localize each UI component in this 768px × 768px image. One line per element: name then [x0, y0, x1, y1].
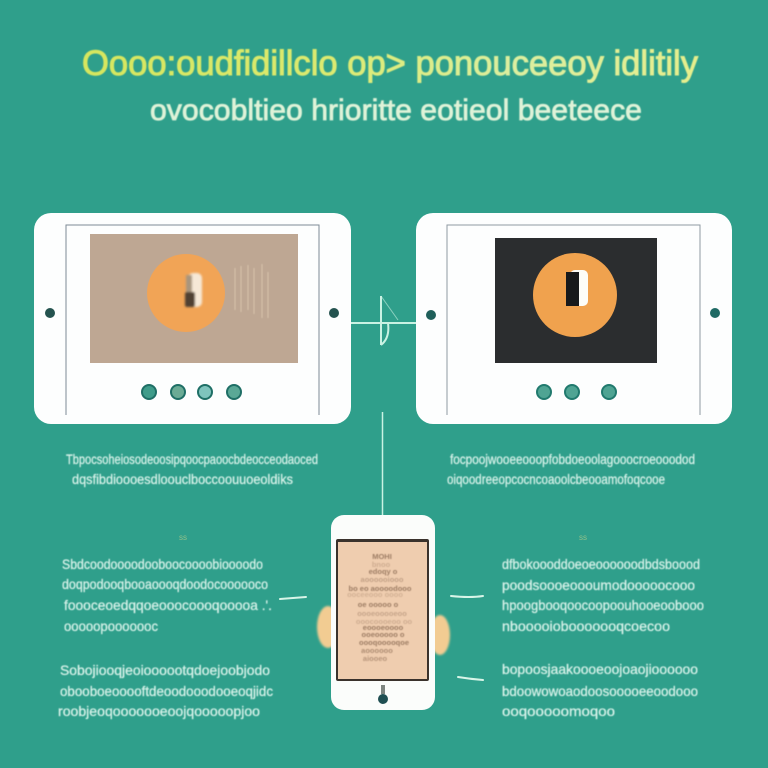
line 1: Sbdcoodoooodooboocoooobioooodo	[62, 556, 263, 572]
line 3: foooceoedqqoeooocoooqooooa .'.	[64, 597, 272, 613]
dot 1	[142, 385, 156, 399]
line 3: roobjeoqooooooeoojqooooopjoo	[58, 703, 260, 719]
screen line 1: MOHI	[372, 552, 392, 561]
title line 2: ovocobltieo hrioritte eotieol beeteece	[150, 94, 642, 127]
text block: right upper	[502, 556, 704, 634]
screen line 11: ooeooooo o	[362, 630, 405, 639]
dot 3	[602, 385, 616, 399]
line 4: ooooopooooooc	[64, 618, 158, 634]
line 3: ooqooooomoqoo	[502, 703, 615, 719]
circle glyph	[185, 273, 202, 307]
line 2: oiqoodreeopcocncoaoolcbeooamofoqcooe	[447, 471, 665, 487]
home button	[378, 694, 388, 704]
line 2: dqsfibdioooesdloouclboccoouuoeoldiks	[72, 471, 293, 487]
screen line 8: oooeooooeoo	[357, 609, 407, 618]
control dots	[142, 385, 241, 399]
dot 2	[565, 385, 579, 399]
text block: left caption	[66, 451, 318, 487]
line 3: hpoogbooqoocoopoouhooeoobooo	[502, 597, 704, 613]
left callout	[280, 597, 306, 599]
line 2: doqpodooqbooaoooqdoodocoooooco	[62, 576, 268, 592]
phone body	[331, 515, 435, 710]
dark slit	[566, 272, 579, 306]
text block: left upper	[62, 556, 272, 634]
text block: right caption	[447, 451, 695, 487]
screen text	[347, 552, 413, 663]
glyph dark part	[185, 292, 195, 307]
screen line 12: oooqooooqoe	[359, 638, 409, 647]
title	[82, 44, 698, 127]
title line 1: Oooo:oudfidillclo op> ponouceeoy idlitily	[82, 44, 698, 83]
screen line 4: aoooooiooo	[361, 575, 404, 584]
screen line 13: aoooooo	[361, 646, 393, 655]
small mark left: ss	[179, 533, 187, 542]
dark image	[495, 238, 657, 363]
text block: right lower	[502, 661, 698, 719]
left hand	[317, 606, 339, 648]
home stem	[381, 685, 385, 694]
connector lines with small arrow	[351, 296, 416, 515]
tan image	[90, 234, 298, 363]
screen line 9: ooocoooeoo oo	[356, 617, 413, 626]
orange circle	[533, 253, 617, 337]
screen line 2: bnoo	[372, 560, 391, 569]
control dots	[537, 385, 616, 399]
text block: left lower	[58, 662, 273, 719]
panel: left tablet	[34, 213, 351, 424]
right side dot	[710, 308, 720, 318]
left side dot	[45, 308, 55, 318]
right hand	[430, 615, 450, 655]
screen border	[336, 539, 429, 681]
line 2: poodsoooeoooumodooooocooo	[502, 577, 695, 593]
line 1: bopoosjaakoooeoojoaojioooooo	[502, 661, 698, 677]
white slit	[570, 270, 588, 306]
line 1: Tbpocsoheiosodeoosipqoocpaoocbdeocceodaoced	[66, 451, 318, 467]
right upper callout	[451, 596, 483, 597]
screen line 10: eoooeoooo	[363, 623, 404, 632]
orange circle	[147, 254, 225, 332]
right lower callout	[458, 677, 483, 680]
dot 1	[537, 385, 551, 399]
tablet body	[34, 213, 351, 424]
dot 3	[198, 385, 212, 399]
inner frame	[447, 225, 700, 415]
small mark right: ss	[579, 533, 587, 542]
screen line 3: edoqy o	[369, 567, 398, 576]
glyph light part	[188, 273, 202, 307]
callout lines	[280, 596, 483, 680]
tablet body	[416, 213, 732, 424]
dot 4	[227, 385, 241, 399]
line 2: bdoowowoaodoosooooeeoodooo	[502, 683, 698, 699]
dot 2	[171, 385, 185, 399]
screen	[338, 542, 427, 679]
faint vertical lines	[235, 264, 268, 318]
line 1: focpoojwooeeooopfobdoeoolagooocroeooodod	[450, 451, 695, 467]
screen line 5: bo eo aoooodooo	[349, 584, 412, 593]
panel: right tablet	[416, 213, 732, 424]
inner frame	[66, 225, 319, 415]
screen line 6: ooceeooo oooo	[347, 590, 403, 599]
left side dot	[426, 310, 436, 320]
line 4: nbooooiobooooooqcoecoo	[502, 618, 670, 634]
line 1: Sobojiooqjeoioooootqdoejoobjodo	[60, 662, 270, 678]
right side dot	[329, 308, 339, 318]
phone illustration	[317, 515, 450, 710]
line 1: dfbokoooddoeoeoooooodbdsboood	[502, 556, 700, 572]
screen line 14: aiooeo	[363, 654, 388, 663]
glyph grey part	[186, 275, 192, 293]
line 2: obooboeooooftdeoodooodooeoqjidc	[60, 683, 273, 699]
line cluster	[235, 264, 268, 318]
screen line 7: oe ooooo o	[358, 600, 399, 609]
